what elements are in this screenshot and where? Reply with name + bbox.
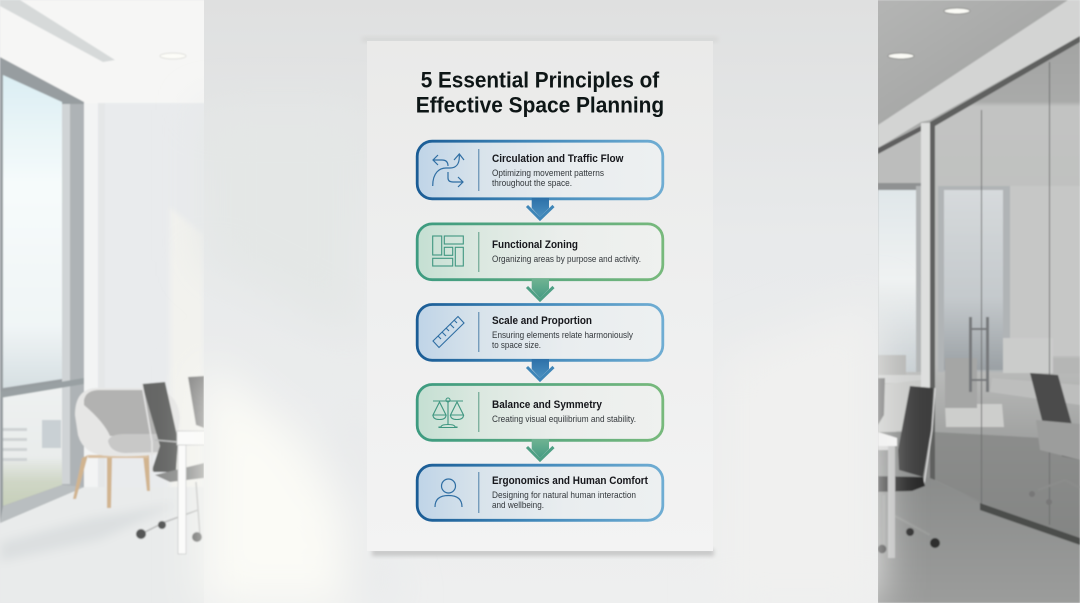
floor	[0, 487, 206, 603]
card text	[492, 239, 641, 264]
reflected furniture left	[878, 355, 906, 375]
door handle	[969, 317, 989, 392]
card 4: Balance and Symmetry	[417, 384, 663, 440]
card text: Creating visual equilibrium and stability.	[492, 414, 636, 424]
ceiling	[0, 0, 206, 103]
icon: ruler	[433, 316, 464, 348]
card text: Ergonomics and Human Comfort	[492, 475, 648, 487]
icon: scales	[433, 398, 464, 428]
card text: Circulation and Traffic Flow	[492, 153, 624, 165]
card text: Ensuring elements relate harmoniously	[492, 330, 633, 340]
card text: Optimizing movement patterns	[492, 168, 604, 178]
reflected floor	[945, 404, 1004, 427]
card text	[492, 153, 624, 188]
divider	[478, 232, 479, 272]
reflected dark chair	[1029, 373, 1080, 505]
arrow 4	[527, 439, 554, 460]
side wall	[84, 103, 206, 490]
background: left office room	[0, 0, 206, 603]
background: central wall	[204, 0, 878, 603]
card text: Scale and Proportion	[492, 315, 592, 327]
arrow 1	[527, 198, 554, 219]
card text	[492, 399, 636, 424]
column	[921, 123, 931, 388]
white table right	[878, 432, 897, 558]
title: Effective Space Planning	[416, 92, 664, 117]
frame	[930, 36, 1080, 480]
glass vertical joints	[982, 62, 1050, 525]
poster panel	[367, 41, 713, 551]
card text: and wellbeing.	[492, 500, 544, 510]
divider	[478, 149, 479, 191]
title: 5 Essential Principles of	[421, 68, 660, 93]
card text	[492, 315, 633, 350]
divider	[478, 312, 479, 352]
ceiling	[876, 0, 1068, 125]
icon: circulation arrows	[433, 154, 464, 187]
door bottom rail	[980, 503, 1080, 545]
ceiling light	[160, 53, 186, 59]
window glass lower	[3, 384, 62, 506]
card 3: Scale and Proportion	[417, 304, 663, 360]
card 5: Ergonomics and Human Comfort	[417, 465, 663, 520]
icon: zoning floor plan	[433, 236, 463, 266]
card text	[492, 475, 648, 510]
divider	[478, 392, 479, 432]
card 1: Circulation and Traffic Flow	[417, 141, 663, 199]
icon: person	[435, 479, 462, 507]
card 2: Functional Zoning	[417, 224, 663, 280]
armchair	[73, 388, 180, 508]
floor	[878, 432, 1080, 603]
arrow 2	[527, 279, 554, 300]
ceiling lights	[944, 8, 970, 14]
card text: Functional Zoning	[492, 239, 578, 251]
ceiling vent	[0, 0, 115, 62]
foreground office chair	[878, 378, 940, 554]
card text: throughout the space.	[492, 178, 572, 188]
card text: Designing for natural human interaction	[492, 490, 636, 500]
left partition glass	[878, 130, 921, 440]
title	[416, 68, 664, 117]
card text: to space size.	[492, 340, 541, 350]
card text: Balance and Symmetry	[492, 399, 603, 411]
office chair left	[136, 376, 204, 542]
card text: Organizing areas by purpose and activity.	[492, 254, 641, 264]
poster shadow	[372, 549, 714, 556]
white table	[177, 431, 206, 554]
arrow 3	[527, 359, 554, 380]
glass partition main	[934, 42, 1080, 538]
background: right office room	[876, 0, 1080, 603]
window glass upper	[3, 75, 62, 388]
window frame	[0, 57, 84, 523]
bulkhead beam	[878, 0, 1080, 148]
divider	[478, 472, 479, 513]
glass reflected window	[938, 186, 1010, 372]
